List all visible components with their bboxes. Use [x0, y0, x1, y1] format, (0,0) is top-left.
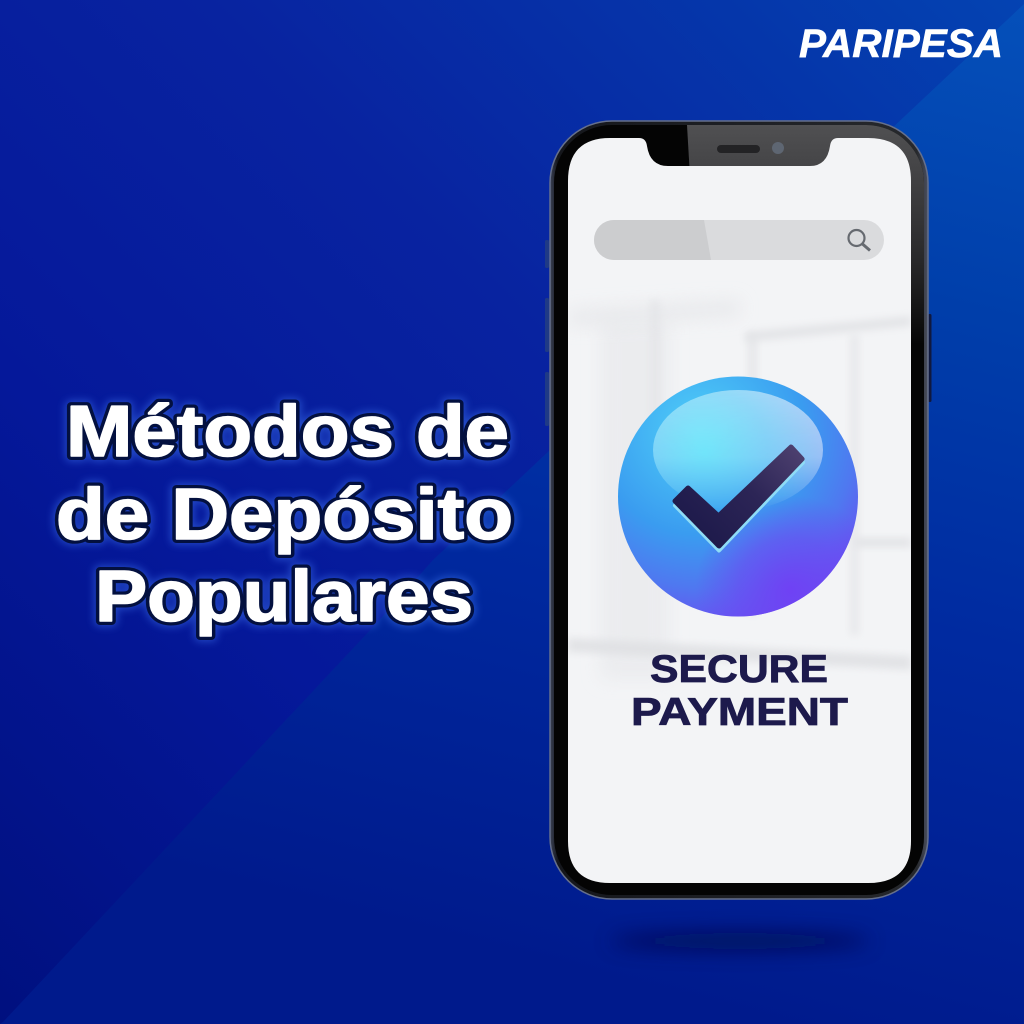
title outline — [56, 392, 513, 637]
phone shadow — [610, 932, 870, 950]
screen — [568, 138, 911, 883]
title glow: de Depósito — [56, 475, 513, 555]
bezel — [554, 125, 924, 895]
title text lines: Populares — [95, 557, 473, 637]
title glow: Populares — [95, 557, 473, 637]
title outline: Métodos de — [66, 392, 509, 472]
purple shading — [707, 502, 851, 616]
camera — [772, 142, 784, 154]
title text lines — [56, 392, 513, 637]
speaker — [717, 145, 760, 153]
icon: checkmark — [675, 447, 803, 550]
title outline: Populares — [95, 557, 473, 637]
label: secure payment: SECURE — [650, 648, 828, 691]
bezel grey reflection — [687, 125, 924, 330]
title text lines: Métodos de — [66, 392, 509, 472]
title glow: Métodos de — [66, 392, 509, 472]
phone body — [550, 121, 928, 899]
label: secure payment — [631, 648, 848, 734]
smartphone — [545, 121, 932, 899]
search bar — [594, 220, 884, 260]
label: secure payment: PAYMENT — [631, 691, 848, 734]
blurred window reflections — [568, 300, 911, 680]
title: Métodos de Depósito Populares — [56, 392, 513, 637]
side buttons — [545, 240, 932, 426]
icon: magnifier — [848, 230, 870, 250]
title text lines: de Depósito — [56, 475, 513, 555]
title outline: de Depósito — [56, 475, 513, 555]
secure check badge — [618, 376, 858, 616]
brand logo: PARIPESA: PARIPESA — [799, 22, 1003, 66]
gloss highlight — [653, 390, 823, 510]
title glow — [56, 392, 513, 637]
